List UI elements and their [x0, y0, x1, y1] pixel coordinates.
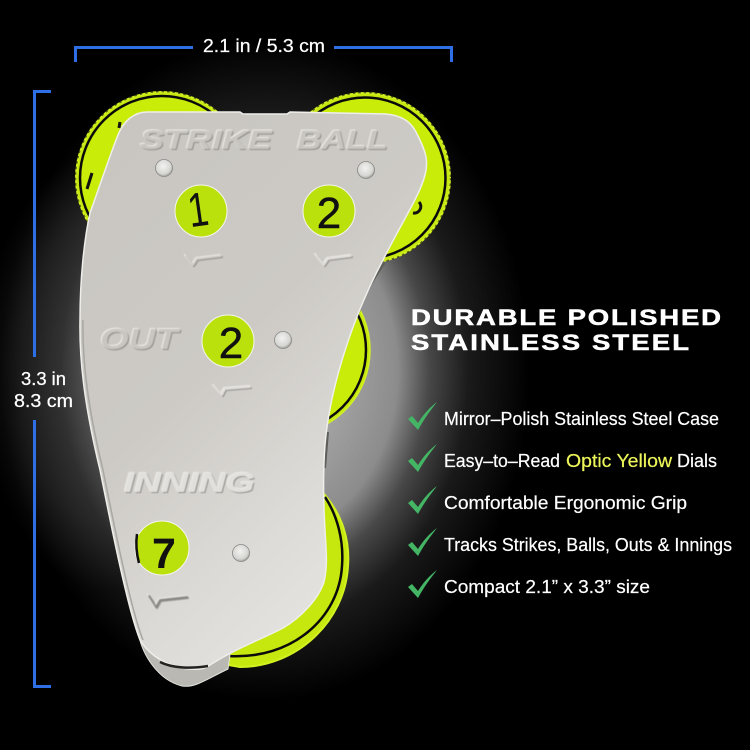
feature 1: [408, 402, 719, 430]
dial window 1: [175, 183, 227, 238]
feature 2: Optic Yellow: [566, 451, 673, 471]
dial window 3: [202, 315, 254, 368]
dimension: width: [76, 35, 452, 62]
embossed labels: INNING: [124, 467, 255, 498]
feature 3: [408, 486, 687, 514]
feature 5: [408, 570, 650, 598]
steel back edge: right side: [324, 262, 384, 468]
dimension: height: [14, 92, 73, 686]
embossed labels: BALL: [297, 125, 388, 155]
steel back edge: lower lip: [138, 620, 232, 686]
indicator device: [76, 92, 450, 686]
feature list: [408, 402, 732, 598]
feature 4: [408, 528, 732, 556]
dial: top left: [76, 92, 248, 264]
rivets: [156, 160, 374, 562]
steel left bevel: [83, 320, 143, 640]
feature 3: Comfortable Ergonomic Grip: [444, 493, 687, 513]
dial: top right: [280, 92, 450, 264]
feature 2: Easy–to–Read: [444, 451, 560, 471]
dial window 3: 2: [219, 319, 243, 368]
heading: [411, 306, 721, 355]
feature 2: [408, 444, 717, 472]
dimension: height: 3.3 in: [21, 369, 66, 389]
dial window 4: 7: [152, 530, 176, 578]
feature 5: Compact 2.1” x 3.3” size: [444, 577, 650, 597]
heading: DURABLE POLISHED: [411, 306, 721, 330]
dial window 1: 1: [184, 183, 212, 238]
embossed labels: [100, 125, 388, 498]
steel bottom shadow: [160, 662, 208, 668]
embossed tick marks: [149, 255, 351, 607]
feature 4: Tracks Strikes, Balls, Outs & Innings: [444, 535, 732, 555]
dimension: height: 8.3 cm: [14, 391, 73, 411]
steel case: [80, 112, 427, 669]
background: left glow: [0, 0, 300, 750]
heading: STAINLESS STEEL: [411, 331, 689, 355]
dimension: width: 2.1 in / 5.3 cm: [203, 35, 325, 56]
dial: middle: [200, 265, 370, 435]
embossed labels: OUT: [100, 324, 181, 356]
embossed labels: STRIKE: [140, 125, 273, 155]
dial: bottom: [217, 495, 348, 667]
dial window 4: [135, 521, 189, 578]
feature 2: Dials: [677, 451, 717, 471]
feature 1: Mirror–Polish Stainless Steel Case: [444, 409, 719, 429]
dial window 2: [303, 185, 355, 238]
dial window 2: 2: [317, 189, 341, 238]
